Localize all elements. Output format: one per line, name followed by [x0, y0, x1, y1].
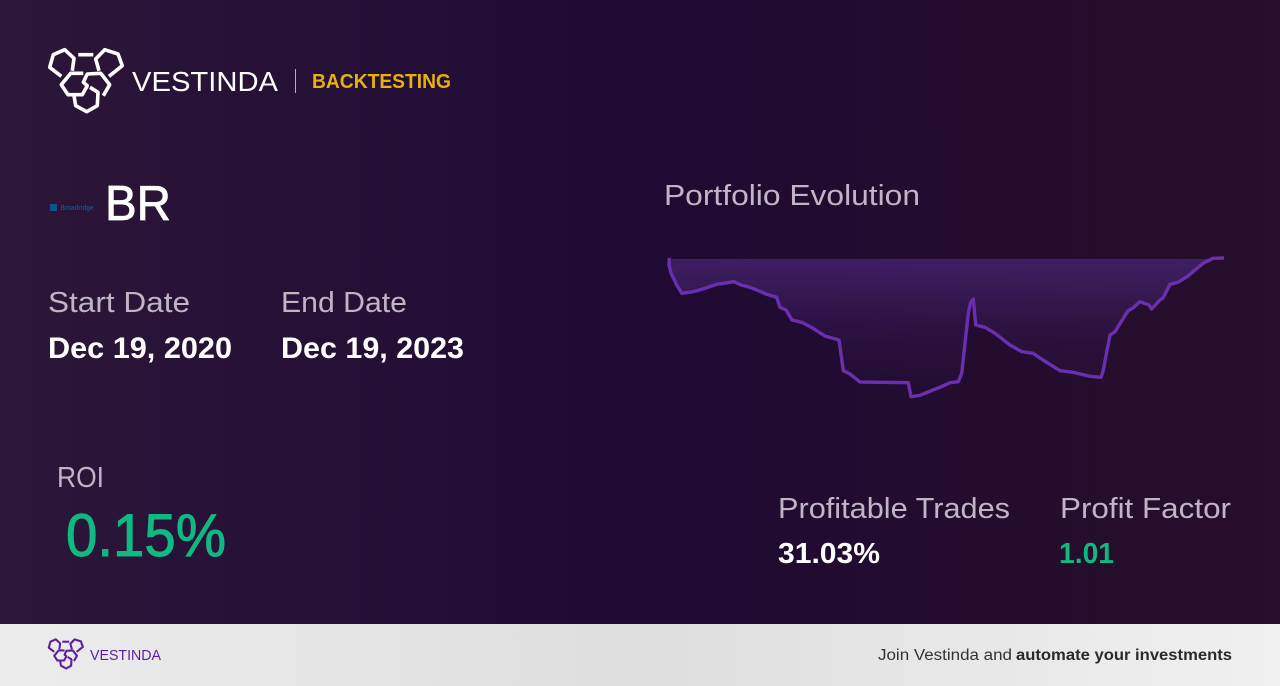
footer call to action: automate your investments — [1016, 647, 1232, 664]
profit factor metric — [1059, 493, 1231, 570]
footer call to action: Join Vestinda and — [878, 647, 1012, 664]
ROI metric: ROI — [57, 462, 104, 494]
end date: End Date — [281, 287, 407, 319]
icon: Broadridge logo: Broadridge — [60, 203, 94, 212]
footer bar — [0, 624, 1280, 686]
profit factor metric: 1.01 — [1059, 538, 1114, 570]
end date — [281, 287, 464, 365]
portfolio evolution chart — [664, 180, 1224, 397]
date range — [48, 287, 464, 365]
brand name: VESTINDA — [132, 66, 278, 97]
ROI metric — [57, 462, 226, 569]
footer brand name: VESTINDA — [90, 648, 161, 664]
section label: BACKTESTING — [312, 71, 451, 93]
ROI metric: 0.15% — [66, 502, 226, 569]
chart title: Portfolio Evolution — [664, 180, 920, 212]
portfolio line — [669, 258, 1224, 397]
ticker heading — [50, 177, 171, 231]
start date: Dec 19, 2020 — [48, 332, 232, 365]
icon: footer logo — [49, 639, 83, 668]
icon: Vestinda hexagon logo — [50, 50, 122, 112]
profitable trades metric: 31.03% — [778, 538, 880, 570]
end date: Dec 19, 2023 — [281, 332, 464, 365]
profitable trades metric — [778, 493, 1010, 570]
header — [50, 50, 451, 112]
start date — [48, 287, 232, 365]
start date: Start Date — [48, 287, 190, 319]
ticker: BR — [105, 177, 171, 231]
profit factor metric: Profit Factor — [1060, 493, 1231, 525]
profitable trades metric: Profitable Trades — [778, 493, 1010, 525]
area fill — [669, 259, 1211, 397]
